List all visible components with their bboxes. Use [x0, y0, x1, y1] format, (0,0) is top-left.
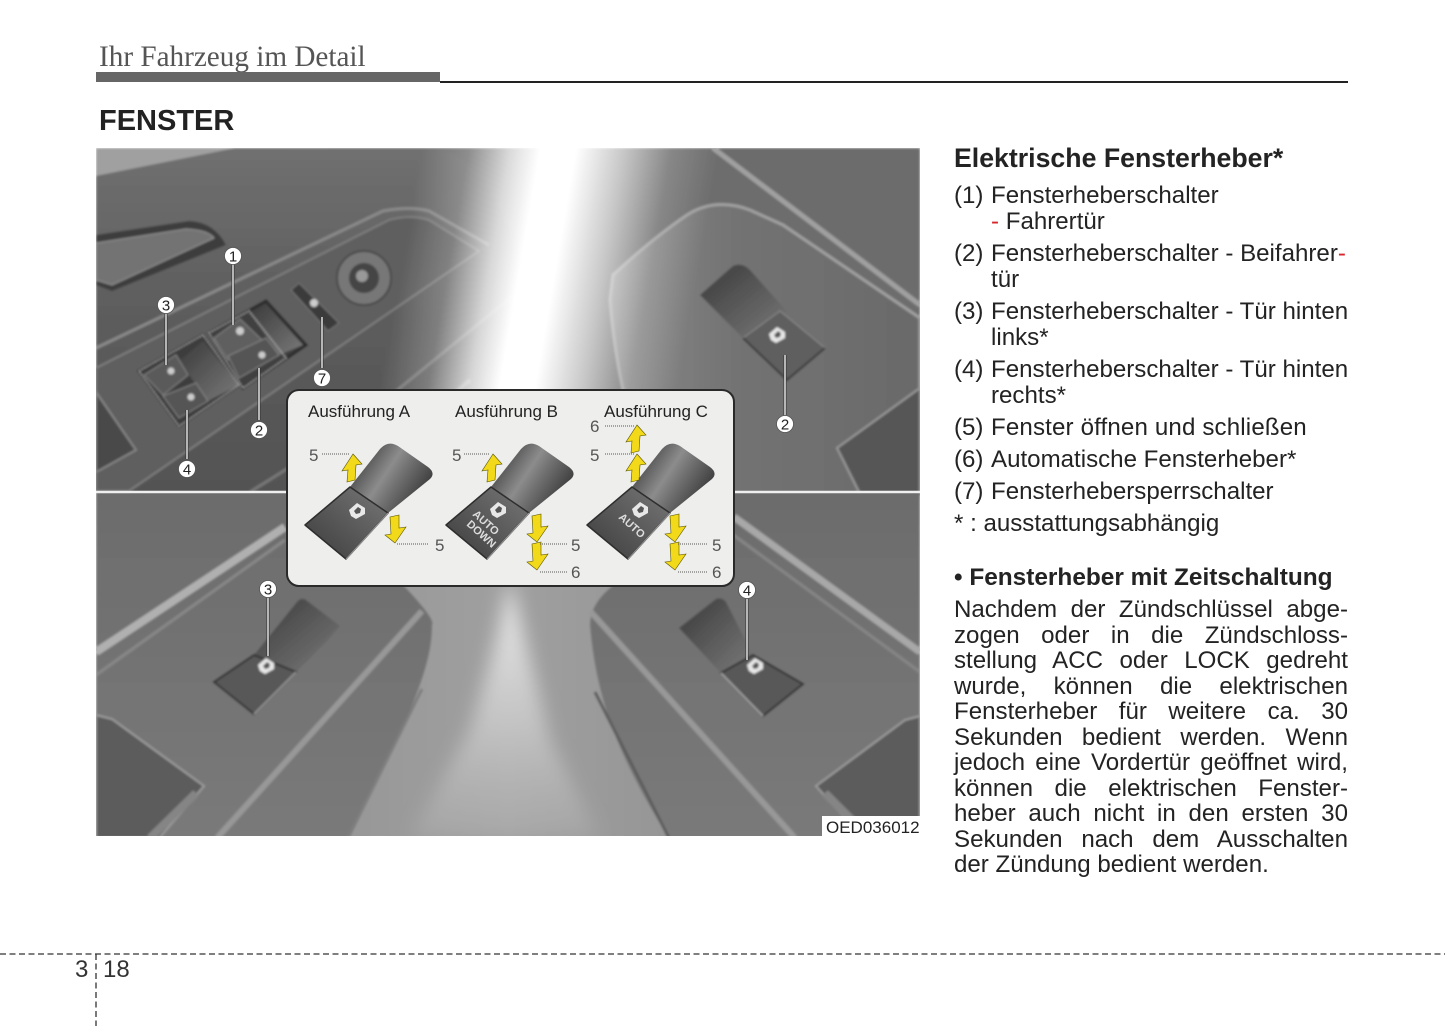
variant B: 5 — [452, 446, 461, 465]
callout 7 — [314, 317, 330, 388]
text: numbered list: Fensterheberschalter - Tür hinten — [991, 298, 1348, 325]
rear left switch — [214, 599, 340, 714]
text: numbered list: (7) — [954, 478, 983, 505]
text: numbered list: (1) — [954, 182, 983, 209]
variant B: DOWN — [464, 518, 498, 551]
text: numbered list: Automatische Fensterheber* — [991, 446, 1296, 473]
text: numbered list: Fensterheberschalter - Tür hinten — [991, 356, 1348, 383]
text: numbered list: (6) — [954, 446, 983, 473]
lower doors — [96, 492, 920, 838]
text: numbered list: Fensterheberschalter - Beifahrer- — [991, 240, 1346, 267]
text: numbered list: rechts* — [991, 382, 1066, 409]
callout 4 — [178, 410, 196, 478]
page number — [75, 956, 130, 983]
text: numbered list: - Fahrertür — [991, 208, 1105, 235]
variant B: AUTO — [470, 508, 501, 538]
text: numbered list: Fenster öffnen und schließen — [991, 414, 1307, 441]
callout 2 passenger — [776, 355, 794, 434]
callout 3 rear — [260, 580, 276, 656]
callout 3: 3 — [162, 298, 170, 314]
variant B: 6 — [571, 563, 580, 582]
inset: switch variants — [287, 390, 734, 586]
text: paragraph: Fensterheber für weitere ca. 30 — [954, 698, 1348, 725]
separators — [96, 491, 920, 493]
variant B — [446, 402, 580, 582]
page number: 18 — [103, 956, 130, 983]
variant C: 6 — [712, 563, 721, 582]
header title: Ihr Fahrzeug im Detail — [99, 41, 366, 73]
centre light fade — [391, 148, 704, 389]
text: sub heading: • Fensterheber mit Zeitschaltung — [954, 564, 1333, 591]
callout 2: 2 — [255, 422, 263, 440]
text: paragraph: zogen oder in die Zündschloss- — [954, 622, 1348, 648]
text: numbered list: links* — [991, 324, 1049, 351]
text: numbered list: Fensterhebersperrschalter — [991, 478, 1274, 505]
mirror knob — [337, 251, 391, 305]
callout 4 rear — [738, 582, 756, 660]
callout 2 passenger: 2 — [781, 416, 789, 434]
background artwork — [96, 148, 920, 838]
section heading: FENSTER — [99, 105, 234, 137]
variant C: 6 — [590, 417, 599, 436]
variant A — [305, 402, 444, 559]
callout 4 rear: 4 — [743, 582, 751, 600]
text: paragraph: wurde, können die elektrischen — [954, 672, 1348, 700]
variant B: 5 — [571, 536, 580, 555]
text: numbered list: (3) — [954, 298, 983, 325]
text: list heading: Elektrische Fensterheber* — [954, 143, 1283, 173]
callout 7: 7 — [318, 370, 326, 388]
text: paragraph: der Zündung bedient werden. — [954, 851, 1269, 878]
header rule — [96, 72, 1348, 83]
rear right switch — [679, 598, 803, 716]
callout 3 rear: 3 — [264, 582, 272, 598]
variant C: AUTO — [616, 511, 647, 541]
text: paragraph: Sekunden bedient werden. Wenn — [954, 724, 1348, 750]
passenger switch — [700, 265, 825, 380]
callout 1 — [224, 248, 242, 325]
text: paragraph: heber auch nicht in den ersten 30 — [954, 800, 1348, 827]
callout 3 — [158, 296, 174, 365]
text: numbered list: (4) — [954, 356, 983, 383]
variant C: Ausführung C — [604, 402, 708, 421]
variant A: 5 — [309, 446, 318, 465]
callout 1: 1 — [229, 248, 237, 266]
text: paragraph: können die elektrischen Fenster- — [954, 774, 1348, 802]
variant C: 5 — [590, 446, 599, 465]
text: numbered list — [954, 182, 1348, 537]
callout 2 — [250, 368, 268, 440]
text: paragraph: Sekunden nach dem Ausschalten — [954, 826, 1348, 852]
page footer rule — [0, 954, 1445, 1026]
lock switch — [293, 284, 337, 330]
text: numbered list: (5) — [954, 414, 983, 441]
variant C — [587, 402, 721, 582]
variant A: Ausführung A — [308, 402, 411, 421]
driver door panel — [96, 148, 520, 494]
variant A: 5 — [435, 536, 444, 555]
passenger door panel — [610, 148, 920, 494]
figure code: OED036012 — [826, 818, 920, 837]
text: paragraph: stellung ACC oder LOCK gedreht — [954, 647, 1348, 674]
page number: 3 — [75, 956, 88, 983]
text: paragraph: jedoch eine Vordertür geöffnet wird, — [954, 749, 1348, 776]
text: paragraph — [953, 596, 1348, 878]
callout 4: 4 — [183, 462, 191, 478]
variant C: 5 — [712, 536, 721, 555]
text: numbered list: tür — [991, 266, 1019, 293]
text: paragraph: Nachdem der Zündschlüssel abge- — [954, 596, 1348, 623]
text: numbered list: Fensterheberschalter — [991, 182, 1219, 209]
driver switch cluster — [139, 301, 306, 426]
variant B: Ausführung B — [455, 402, 558, 421]
text: numbered list: (2) — [954, 240, 983, 267]
text: numbered list: * : ausstattungsabhängig — [954, 510, 1219, 537]
